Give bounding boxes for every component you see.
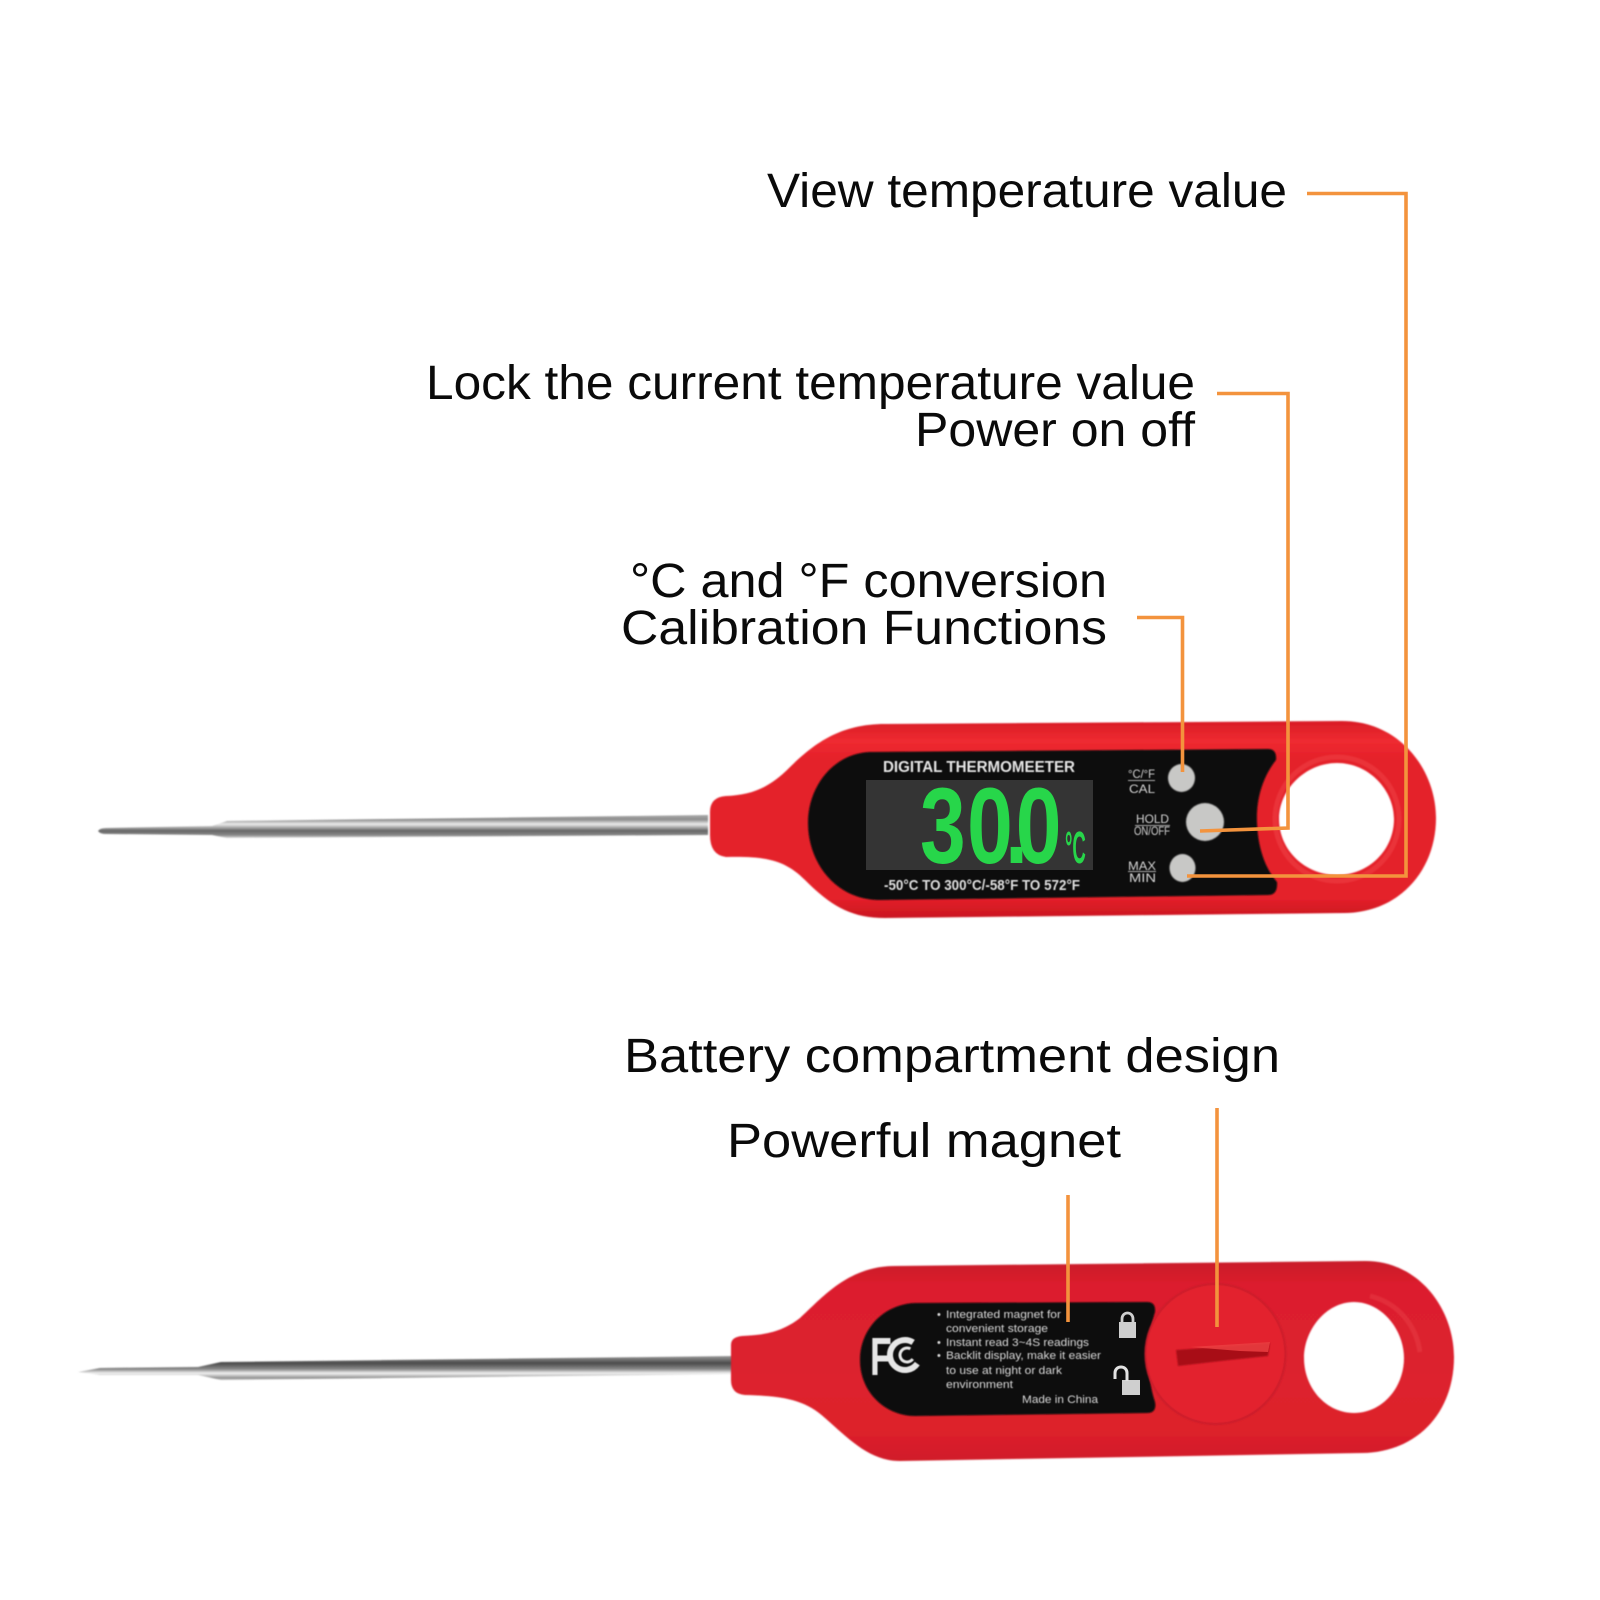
leader: view temperature [1187,194,1406,876]
icon: open lock [1115,1367,1140,1395]
button labels [1128,767,1170,885]
button labels: CAL [1129,782,1155,796]
leader: magnet [1066,1195,1070,1322]
probe: back [78,1356,734,1380]
spec text: Made in China [1022,1394,1099,1406]
body: red handle back [731,1261,1454,1461]
button labels: MAX [1128,859,1156,873]
label: lock temperature and power: Power on off [915,404,1196,457]
button labels: °C/°F [1128,767,1155,781]
icon: closed lock [1119,1313,1136,1338]
logo: FC: F [870,1327,892,1387]
reading: 30.0: 0 [1016,766,1061,887]
buttons [1168,764,1224,882]
reading: 30.0: 0 [967,766,1013,887]
leader: hold and power [1200,394,1288,831]
leader: conversion [1137,618,1182,772]
spec text: convenient storage [946,1323,1048,1335]
button labels: HOLD [1136,812,1169,826]
spec text: • [937,1337,941,1349]
thermometer: front view [98,721,1436,918]
panel: black display faceplate [808,749,1277,900]
cover slot [1176,1343,1270,1366]
range text: -50°C TO 300°C/-58°F TO 572°F [884,877,1080,894]
leader: battery [1215,1108,1219,1327]
logo: FC [870,1327,926,1387]
spec text: to use at night or dark [946,1365,1063,1377]
label: lock temperature and power: Lock the current temperature value [426,357,1195,410]
spec text [937,1309,1101,1406]
reading: 30.0: . [1005,766,1028,887]
panel: back label [860,1302,1155,1416]
probe: front [98,815,708,838]
label: unit conversion and calibration: °C and °F conversion [630,555,1107,608]
label: lock temperature and power [426,357,1196,457]
label: unit conversion and calibration: Calibration Functions [621,602,1107,655]
spec text: Backlit display, make it easier [946,1350,1101,1362]
brand text: DIGITAL THERMOMEETER [883,759,1075,776]
unit: degrees C: °C [1065,824,1086,873]
label: battery compartment: Battery compartment design [624,1030,1280,1083]
thermometer: back view [78,1261,1454,1461]
body: red handle [710,721,1436,918]
label: powerful magnet: Powerful magnet [727,1115,1121,1168]
spec text: • [937,1309,941,1321]
lcd screen [866,766,1093,887]
button labels: ON/OFF [1134,824,1170,838]
spec text: Integrated magnet for [946,1309,1061,1321]
label: view temperature value: View temperature value [767,165,1287,218]
label: unit conversion and calibration [621,555,1107,655]
battery cover [1146,1284,1286,1424]
spec text: environment [946,1379,1013,1391]
spec text: • [937,1350,941,1362]
button labels: MIN [1129,871,1156,885]
spec text: Instant read 3~4S readings [946,1337,1090,1349]
reading: 30.0: 3 [920,766,966,887]
